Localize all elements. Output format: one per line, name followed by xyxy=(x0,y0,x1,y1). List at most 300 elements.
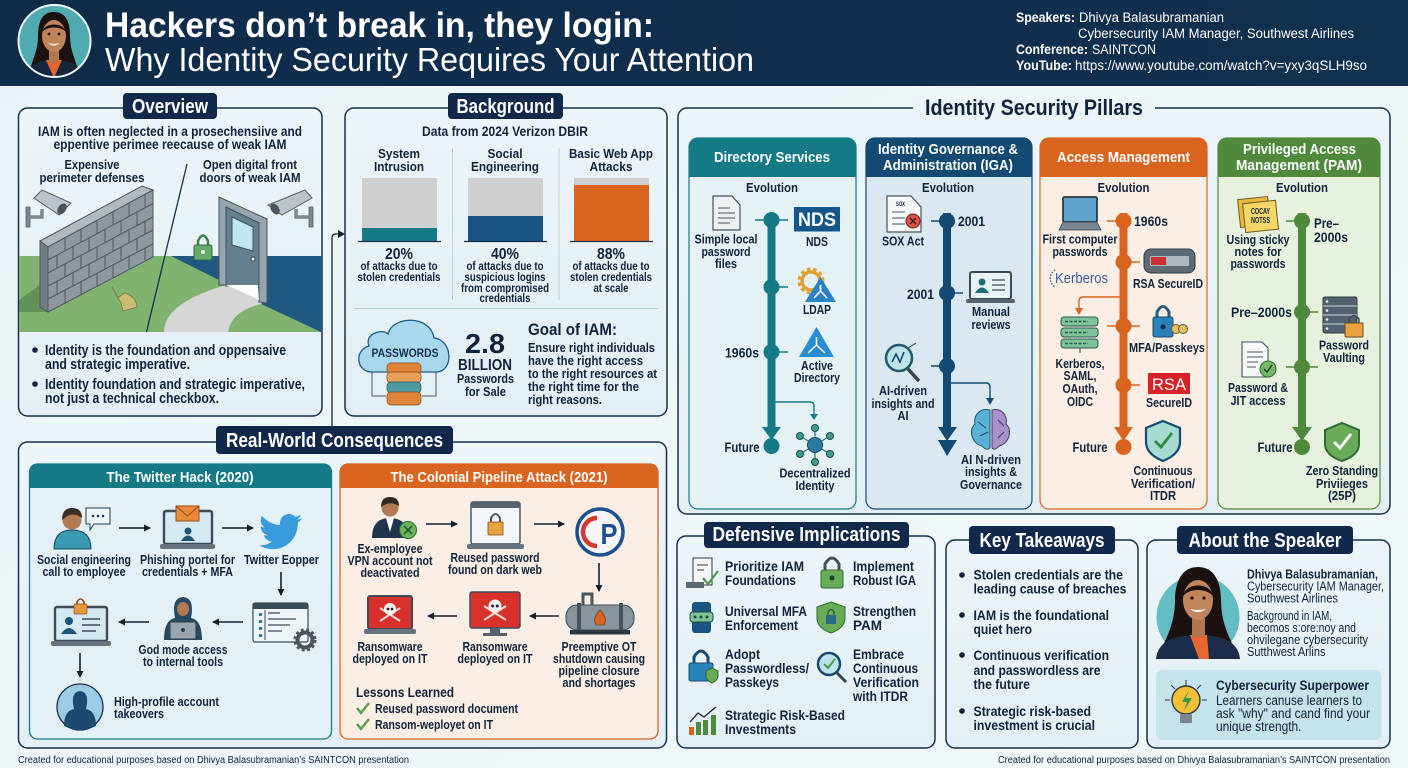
label: simple local password files xyxy=(694,232,758,271)
text: ransomware center: deployed on IT xyxy=(458,651,533,666)
heading: real-world consequences xyxy=(216,426,453,454)
label: manual reviews xyxy=(972,304,1010,332)
takeaway 3: Continuous verification xyxy=(974,647,1109,663)
icon: document with check xyxy=(1242,342,1276,377)
arrow xyxy=(428,615,457,617)
text: preemptive OT shutdown: pipeline closure xyxy=(558,663,640,678)
item: strengthen PAM xyxy=(817,602,916,633)
speaker details: Dhivya Balasubramanian xyxy=(1079,10,1224,25)
panel: key takeaways xyxy=(946,526,1138,748)
item: universal MFA enforcement: Universal MFA xyxy=(725,603,807,619)
takeaway 3: the future xyxy=(974,676,1030,692)
label: first computer passwords xyxy=(1042,232,1118,259)
heading: key takeaways: Key Takeaways xyxy=(980,530,1104,552)
text: goal of IAM: Goal of IAM: xyxy=(528,320,617,339)
icon: SOX document xyxy=(887,196,921,232)
icon: sticky notes: NOTSS xyxy=(1251,216,1270,225)
label: AI driven governance: AI N-driven xyxy=(961,452,1021,467)
panel: overview xyxy=(18,93,322,416)
icon: twitter bird xyxy=(259,514,302,549)
speaker details xyxy=(1016,10,1367,73)
timeline xyxy=(755,212,818,454)
label: pre-2000s top: 2000s xyxy=(1314,229,1348,245)
text: lessons learned xyxy=(356,684,519,732)
label: continuous verification xyxy=(1131,463,1195,503)
item: adopt passwordless passkeys: Adopt xyxy=(725,646,760,662)
text: social engineering call xyxy=(37,552,131,579)
chart: system intrusion 20 percent xyxy=(358,146,441,284)
text: data source: Data from 2024 Verizon DBIR xyxy=(422,124,588,139)
icon: protocol server xyxy=(1061,317,1098,353)
chart: basic web app attacks 88 percent: of attacks due to xyxy=(572,259,650,273)
text: ex-employee: deactivated xyxy=(360,565,420,580)
icon: ransomware laptop xyxy=(364,596,416,634)
icon: passwords cloud and database: PASSWORDS xyxy=(372,346,438,360)
label: password vaulting: Password xyxy=(1319,338,1369,352)
heading: background: Background xyxy=(456,96,554,118)
text: god mode access xyxy=(138,642,228,669)
icon: open door xyxy=(219,197,267,303)
text: lessons learned: Lessons Learned xyxy=(356,684,454,700)
icon: active directory xyxy=(799,327,834,357)
icon: right security camera xyxy=(268,190,313,227)
text: preemptive OT shutdown: and shortages xyxy=(562,675,636,690)
text: speaker bio: ohvilegane cybersecurity xyxy=(1247,632,1368,647)
stat: 2.8 billion passwords for sale: BILLION xyxy=(458,357,512,374)
speaker details: https://www.youtube.com/watch?v=yxy3qSLH9so xyxy=(1075,58,1367,73)
timeline xyxy=(1075,213,1140,454)
label: future: Future xyxy=(1258,440,1293,455)
label: continuous verification: Verification/ xyxy=(1131,476,1195,491)
icon: password vault xyxy=(1323,297,1363,337)
label: sticky notes: Using sticky xyxy=(1226,232,1290,247)
label: AI driven governance: Governance xyxy=(960,477,1022,492)
panel: about the speaker xyxy=(1147,526,1390,748)
text: overview intro: IAM is often neglected in a prosechensiive and xyxy=(38,124,302,139)
text: open digital front doors: doors of weak IAM xyxy=(200,170,300,185)
text: goal of IAM: Ensure right individuals xyxy=(528,340,655,355)
icon: sticky notes: COCAY xyxy=(1251,207,1270,216)
label: LDAP: LDAP xyxy=(803,302,831,317)
arrow xyxy=(79,653,81,677)
label: protocols: Kerberos, xyxy=(1056,356,1104,371)
callout: cybersecurity superpower xyxy=(1156,670,1382,740)
panel: defensive implications xyxy=(677,522,935,748)
column: access management: Evolution xyxy=(1098,180,1150,195)
label: decentralized identity xyxy=(780,466,851,493)
text: ransomware center: Ransomware xyxy=(462,639,528,654)
item: embrace continuous verification: Verification xyxy=(853,674,919,690)
chart: system intrusion 20 percent: stolen credentials xyxy=(358,270,441,284)
callout: cybersecurity superpower: Learners canuse learners to xyxy=(1216,693,1362,708)
item: embrace continuous verification: Continuous xyxy=(853,660,918,676)
chart: social engineering 40 percent: from compromised xyxy=(461,281,549,295)
label: NDS: NDS xyxy=(806,234,828,249)
text: overview bullets xyxy=(32,343,305,407)
column: access management: Access Management xyxy=(1057,149,1190,166)
footer: left credit: Created for educational purposes based on Dhivya Balasubramanian’s SAINTCON presentation xyxy=(18,755,409,766)
illustration: wall versus open door xyxy=(19,164,322,332)
icon: SOX document: SOX xyxy=(896,202,905,208)
chart: social engineering 40 percent: Engineering xyxy=(471,159,539,174)
card: twitter hack xyxy=(30,464,332,739)
label: sticky notes: passwords xyxy=(1230,256,1286,271)
text: goal of IAM: the right time for the xyxy=(528,379,639,394)
text: overview intro: eppentive perimee reecause of weak IAM xyxy=(54,137,286,152)
item: prioritize IAM foundations: Prioritize IAM xyxy=(725,558,804,574)
icon: employee on a call xyxy=(54,508,110,549)
text: preemptive OT shutdown xyxy=(553,639,645,690)
column: privileged access management: Evolution xyxy=(1276,180,1328,195)
takeaway 3: and passwordless are xyxy=(974,662,1101,678)
text: twitter label: Twitter Eopper xyxy=(244,552,319,567)
item: adopt passwordless passkeys: Passkeys xyxy=(725,674,779,690)
text: goal of IAM xyxy=(528,320,658,407)
logo: kerberos: Kerberos xyxy=(1055,270,1108,287)
label: first computer passwords: passwords xyxy=(1052,244,1108,259)
heading: key takeaways xyxy=(969,526,1115,554)
label: simple local password files: Simple local xyxy=(694,232,758,246)
text: ransomware left xyxy=(352,639,428,666)
text: overview bullets: not just a technical checkbox. xyxy=(45,391,219,407)
icon: phishing laptop xyxy=(160,506,215,549)
label: RSA SecureID: RSA SecureID xyxy=(1133,276,1203,291)
text: expensive perimeter defenses: perimeter defenses xyxy=(40,170,144,185)
chart: social engineering 40 percent: Social xyxy=(488,146,522,161)
column: privileged access management: Privileged Access xyxy=(1243,141,1356,158)
label: decentralized identity: Decentralized xyxy=(780,466,851,480)
icon: passwords cloud and database xyxy=(359,320,449,405)
label: sticky notes: notes for xyxy=(1234,244,1282,259)
text: open digital front doors xyxy=(200,157,300,185)
label: future: Future xyxy=(724,440,760,455)
takeaway 3 xyxy=(959,647,1109,692)
takeaway 2: IAM is the foundational xyxy=(974,607,1109,623)
takeaway 2: quiet hero xyxy=(974,621,1032,637)
icon: admin window with gear xyxy=(253,603,316,650)
column: directory services: Directory Services xyxy=(714,149,830,166)
label: 1960s: 1960s xyxy=(725,346,759,360)
icon: brick wall xyxy=(40,186,153,312)
icon: speaker portrait xyxy=(20,6,90,76)
item: strategic risk-based investments: Investments xyxy=(725,721,796,737)
heading: real-world consequences: Real-World Consequences xyxy=(226,430,443,452)
speaker details: SAINTCON xyxy=(1092,42,1156,57)
text: expensive perimeter defenses: Expensive xyxy=(64,157,120,172)
text: account takeovers xyxy=(114,694,220,721)
label: future: Future xyxy=(1072,440,1108,455)
chart: social engineering 40 percent: suspicious logins xyxy=(464,270,546,284)
arrow xyxy=(222,527,253,529)
text: preemptive OT shutdown: Preemptive OT xyxy=(562,639,637,654)
title: Hackers don’t break in, they login: xyxy=(105,6,654,45)
label: AI-driven insights: AI-driven xyxy=(879,383,927,398)
label: password vaulting xyxy=(1319,338,1369,365)
item: implement robust IGA xyxy=(821,558,916,588)
callout: cybersecurity superpower: ask "why" and cand find your xyxy=(1216,706,1370,721)
icon: profile laptop with lock xyxy=(51,599,111,646)
card: colonial pipeline attack xyxy=(340,464,658,739)
stat: 2.8 billion passwords for sale: Passwords xyxy=(457,371,514,386)
icon: colonial pipeline logo: P xyxy=(600,519,618,551)
text: ransomware left: deployed on IT xyxy=(352,651,428,666)
heading: identity security pillars: Identity Security Pillars xyxy=(925,95,1143,120)
connector arrow: consequences to background xyxy=(332,230,345,428)
text: lessons learned: Reused password document xyxy=(375,701,519,716)
label: active directory: Active xyxy=(801,358,833,373)
card: twitter hack: The Twitter Hack (2020) xyxy=(106,469,254,486)
label: password and JIT access: JIT access xyxy=(1230,393,1286,408)
label: continuous verification: ITDR xyxy=(1150,488,1177,503)
chart: basic web app attacks 88 percent: 88% xyxy=(597,246,625,263)
icon: left security camera xyxy=(26,190,71,227)
takeaway 4: Strategic risk-based xyxy=(974,703,1091,719)
label: sticky notes xyxy=(1226,232,1290,271)
icon: RSA logo: RSA xyxy=(1152,375,1187,394)
label: password and JIT access: Password & xyxy=(1228,380,1288,395)
icon: hacker at a laptop xyxy=(164,597,202,640)
icon: RSA token xyxy=(1144,249,1195,273)
label: AI driven governance: insights & xyxy=(965,464,1017,479)
chart: system intrusion 20 percent: System xyxy=(378,146,420,161)
text: speaker bio: Cybersecurity IAM Manager, xyxy=(1247,578,1384,594)
column: identity governance and administration xyxy=(866,138,1032,509)
text: god mode access: to internal tools xyxy=(143,654,223,669)
text: social engineering call: Social engineering xyxy=(37,552,131,567)
icon: password file xyxy=(713,196,740,230)
text: speaker bio xyxy=(1247,566,1384,659)
label: MFA passkeys: MFA/Passkeys xyxy=(1129,340,1205,355)
label: manual reviews: Manual xyxy=(972,304,1010,319)
header banner xyxy=(0,0,1408,86)
column: access management xyxy=(1040,138,1207,509)
label: decentralized identity: Identity xyxy=(796,478,835,493)
text: goal of IAM: right reasons. xyxy=(528,392,602,407)
icon: fuel tank with flame xyxy=(566,594,634,634)
label: zero standing privileges: Zero Standing xyxy=(1306,463,1378,478)
item: embrace continuous verification xyxy=(818,646,919,704)
item: universal MFA enforcement xyxy=(690,602,807,633)
item: prioritize IAM foundations: Foundations xyxy=(725,572,796,588)
text: ransomware center xyxy=(458,639,533,666)
arrow xyxy=(280,572,282,595)
label: 2001: 2001 xyxy=(958,213,985,229)
item: implement robust IGA: Robust IGA xyxy=(853,572,916,588)
chart: basic web app attacks 88 percent: Basic Web App xyxy=(569,146,653,161)
label: protocols: OIDC xyxy=(1067,394,1093,409)
text: goal of IAM: have the right access xyxy=(528,353,643,368)
takeaway 4: investment is crucial xyxy=(974,717,1095,733)
heading: overview: Overview xyxy=(132,96,208,118)
icon: yellow shrub xyxy=(112,287,137,311)
item: implement robust IGA: Implement xyxy=(853,558,914,574)
item: strategic risk-based investments xyxy=(689,707,845,737)
column: privileged access management: Management (PAM) xyxy=(1236,157,1362,174)
icon: verification shield xyxy=(1146,421,1180,461)
icon: AI magnifier xyxy=(886,343,919,381)
text: preemptive OT shutdown: shutdown causing xyxy=(553,651,645,666)
label: SecureID: SecureID xyxy=(1146,395,1192,410)
chart: system intrusion 20 percent: 20% xyxy=(385,246,413,263)
stat: 2.8 billion passwords for sale xyxy=(457,328,514,399)
stat: 2.8 billion passwords for sale: for Sale xyxy=(465,384,506,399)
text: phishing portal: credentials + MFA xyxy=(142,564,233,579)
label: zero standing privileges xyxy=(1306,463,1378,503)
text: ex-employee: VPN account not xyxy=(348,553,433,568)
label: AI-driven insights: insights and xyxy=(872,396,935,411)
label: manual reviews: reviews xyxy=(972,317,1010,332)
chart: basic web app attacks 88 percent: at scale xyxy=(594,281,629,295)
icon: anonymous account avatar xyxy=(57,684,103,730)
label: AI driven governance xyxy=(960,452,1022,492)
label: pre-2000s top: Pre– xyxy=(1314,215,1339,231)
icon: MFA lock xyxy=(1153,306,1188,337)
column: privileged access management xyxy=(1218,138,1380,509)
heading: about the speaker xyxy=(1177,526,1353,554)
text: goal of IAM: to the right resources at xyxy=(528,366,658,381)
arrow xyxy=(530,615,559,617)
chart: social engineering 40 percent: credentials xyxy=(480,291,531,305)
label: password vaulting: Vaulting xyxy=(1323,350,1365,365)
label: protocols: OAuth, xyxy=(1062,381,1098,396)
callout: cybersecurity superpower: Cybersecurity Superpower xyxy=(1216,678,1370,693)
label: pre-2000s top xyxy=(1314,215,1348,245)
icon: green padlock xyxy=(194,236,212,260)
chart: basic web app attacks 88 percent: stolen credentials xyxy=(570,270,652,284)
speaker details: Conference: xyxy=(1016,42,1088,57)
takeaway 1 xyxy=(959,566,1127,596)
icon: speaker portrait large xyxy=(1156,567,1240,659)
icon: NDS: NDS xyxy=(798,210,836,231)
label: simple local password files: files xyxy=(715,256,737,271)
label: pre-2000s middle: Pre–2000s xyxy=(1231,304,1292,320)
text: reused password: found on dark web xyxy=(448,562,542,577)
text: speaker bio: Sutthwest Arlins xyxy=(1247,644,1326,659)
takeaway 2 xyxy=(959,607,1109,637)
label: first computer passwords: First computer xyxy=(1042,232,1118,246)
text: ex-employee: Ex-employee xyxy=(358,541,422,556)
stat: 2.8 billion passwords for sale: 2.8 xyxy=(465,328,505,359)
heading: defensive implications: Defensive Implications xyxy=(712,524,900,546)
arrow xyxy=(213,621,243,623)
label: active directory: Directory xyxy=(794,370,841,385)
title: Why Identity Security Requires Your Attention xyxy=(105,41,754,78)
icon: browser with lock xyxy=(467,502,524,549)
label: simple local password files: password xyxy=(702,244,751,259)
speaker details: Speakers: xyxy=(1016,10,1075,25)
column: directory services: Evolution xyxy=(746,180,798,195)
item: embrace continuous verification: Embrace xyxy=(853,646,904,662)
icon: LDAP xyxy=(799,269,836,302)
column: identity governance and administration: Identity Governance & xyxy=(878,141,1018,158)
text: expensive perimeter defenses xyxy=(40,157,144,185)
text: speaker bio: Dhivya Balasubramanian, xyxy=(1247,566,1378,582)
panel: real-world consequences xyxy=(18,426,666,748)
icon: manual review laptop xyxy=(966,272,1015,303)
label: zero standing privileges: Priviieges xyxy=(1316,476,1368,491)
callout: cybersecurity superpower: unique strength. xyxy=(1216,719,1302,734)
text: lessons learned: Ransom-weployet on IT xyxy=(375,717,493,732)
chart: social engineering 40 percent: of attacks due to xyxy=(466,259,544,273)
icon: ransomware monitor xyxy=(470,592,520,636)
item: strengthen PAM: PAM xyxy=(853,617,882,633)
text: phishing portal: Phishing portel for xyxy=(140,552,235,567)
item: universal MFA enforcement: Enforcement xyxy=(725,617,798,633)
arrow xyxy=(598,563,600,591)
label: active directory xyxy=(794,358,841,385)
icon: first computer laptop xyxy=(1059,197,1101,230)
takeaway 1: leading cause of breaches xyxy=(974,580,1127,596)
arrow xyxy=(426,523,457,525)
panel: background xyxy=(345,93,667,416)
text: overview intro xyxy=(38,124,302,152)
text: speaker bio: becomos s:ore:noy and xyxy=(1247,620,1356,635)
card: colonial pipeline attack: The Colonial Pipeline Attack (2021) xyxy=(390,469,608,486)
chart: basic web app attacks 88 percent xyxy=(569,146,653,295)
text: reused password xyxy=(448,550,542,577)
timeline xyxy=(931,213,994,456)
label: password and JIT access xyxy=(1228,380,1288,408)
title xyxy=(105,6,754,78)
takeaway 4 xyxy=(959,703,1095,733)
text: social engineering call: call to employee xyxy=(42,564,126,579)
takeaway 1: Stolen credentials are the xyxy=(974,566,1123,582)
arrow xyxy=(534,523,564,525)
icon: green shield xyxy=(1325,423,1359,461)
text: overview bullets: Identity is the foundation and oppensaive xyxy=(45,343,286,359)
text: ransomware left: Ransomware xyxy=(358,639,422,654)
label: continuous verification: Continuous xyxy=(1134,463,1192,478)
item: strengthen PAM: Strengthen xyxy=(853,603,916,619)
heading: about the speaker: About the Speaker xyxy=(1188,530,1342,552)
label: 1960s: 1960s xyxy=(1134,213,1168,229)
label: protocols: SAML, xyxy=(1064,368,1096,383)
icon: colonial pipeline logo xyxy=(577,509,623,555)
column: directory services xyxy=(689,138,856,509)
text: phishing portal xyxy=(140,552,235,579)
text: account takeovers: High-profile account xyxy=(114,694,220,709)
label: AI-driven insights: AI xyxy=(898,408,908,423)
column: identity governance and administration: Administration (IGA) xyxy=(883,157,1013,174)
icon: lightbulb xyxy=(1165,680,1207,723)
text: overview bullets: Identity foundation and strategic imperative, xyxy=(45,377,305,393)
label: AI-driven insights xyxy=(872,383,935,423)
item: adopt passwordless passkeys: Passwordless/ xyxy=(725,660,809,676)
item: strategic risk-based investments: Strategic Risk-Based xyxy=(725,707,845,723)
text: ex-employee xyxy=(348,541,433,580)
panel: identity security pillars xyxy=(678,95,1390,514)
arrow xyxy=(119,621,149,623)
text: overview bullets: and strategic imperative. xyxy=(45,357,190,373)
chart: system intrusion 20 percent: Intrusion xyxy=(374,159,424,174)
text: reused password: Reused password xyxy=(450,550,540,565)
speaker details: YouTube: xyxy=(1016,58,1072,73)
text: account takeovers: takeovers xyxy=(114,706,164,721)
speaker details: Cybersecurity IAM Manager, Southwest Airlines xyxy=(1078,26,1354,41)
text: god mode access: God mode access xyxy=(138,642,228,657)
chart: basic web app attacks 88 percent: Attacks xyxy=(590,159,632,174)
text: open digital front doors: Open digital front xyxy=(203,157,298,172)
column: identity governance and administration: Evolution xyxy=(922,180,974,195)
item: adopt passwordless passkeys xyxy=(689,646,809,690)
label: SOX act: SOX Act xyxy=(882,234,925,248)
label: 2001: 2001 xyxy=(907,286,934,302)
item: prioritize IAM foundations xyxy=(686,558,804,588)
text: speaker bio: Southwest Airlines xyxy=(1247,590,1338,606)
icon: AI brain xyxy=(971,409,1010,449)
icon: sticky notes xyxy=(1238,197,1278,233)
item: embrace continuous verification: with ITDR xyxy=(852,688,908,704)
